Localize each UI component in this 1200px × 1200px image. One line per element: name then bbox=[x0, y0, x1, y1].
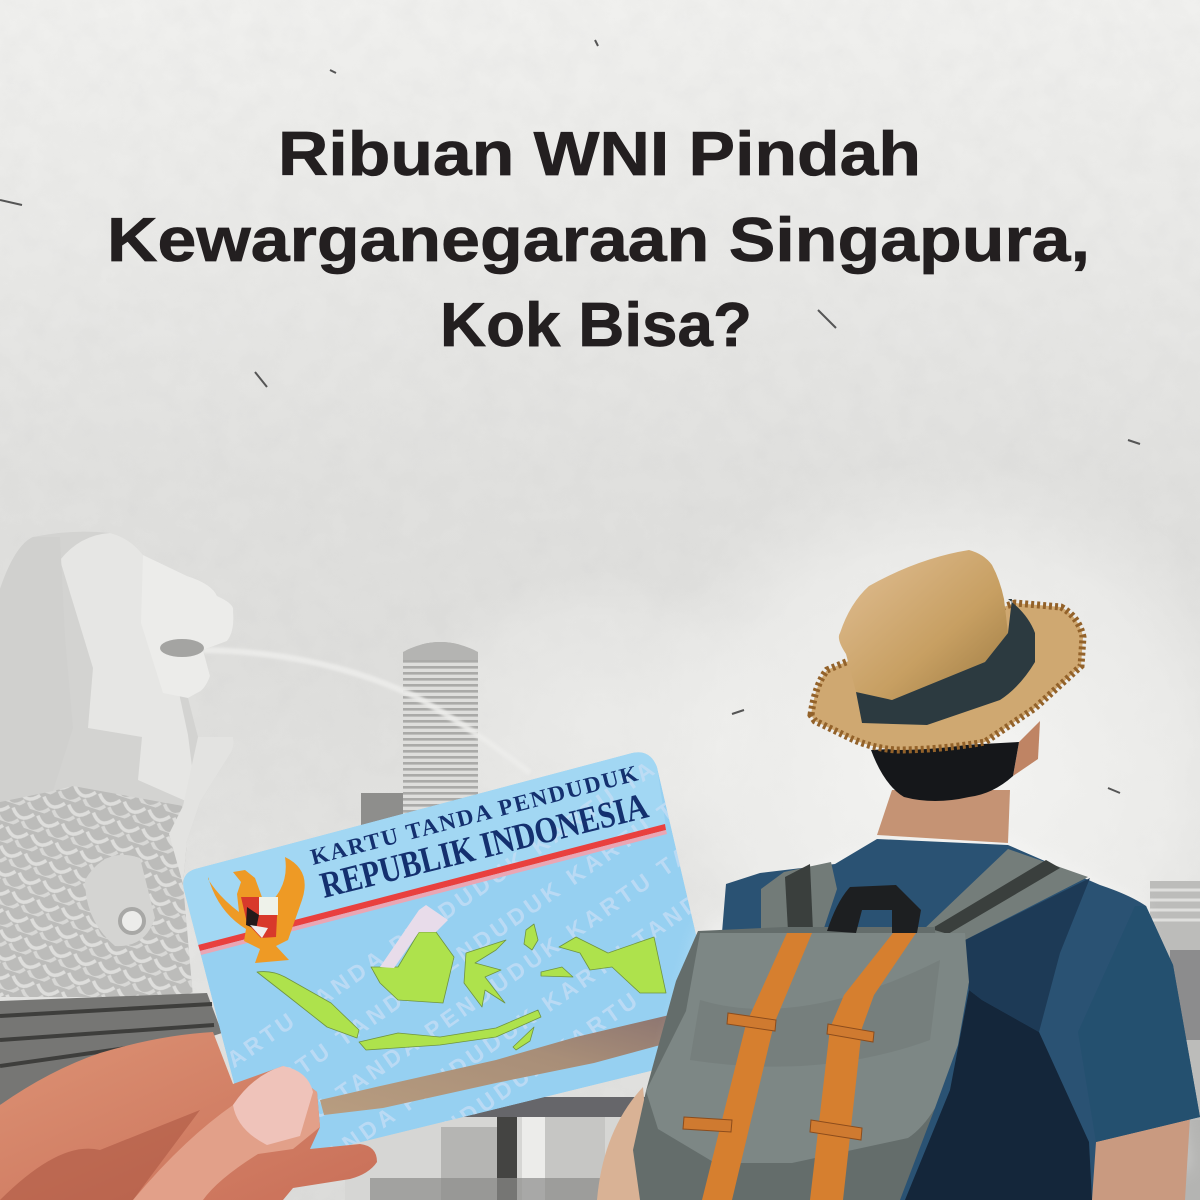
card heading: REPUBLIK INDONESIA bbox=[316, 786, 652, 907]
card watermark text: TANDA PENDUDUK KARTU TANDA bbox=[307, 875, 724, 1178]
backpack handle bbox=[827, 885, 921, 933]
left arm bbox=[597, 1087, 653, 1200]
map: Seram bbox=[541, 967, 573, 977]
title: Kewarganegaraan Singapura, bbox=[107, 206, 1090, 275]
orange straps bbox=[702, 933, 812, 1200]
land strip bbox=[320, 1013, 690, 1115]
hat crown bbox=[839, 550, 1008, 700]
title: Kok Bisa? bbox=[440, 291, 752, 360]
map: Java and Nusa Tenggara bbox=[359, 1010, 541, 1050]
backpack body bbox=[633, 927, 935, 1200]
skyline: tower bbox=[361, 642, 478, 827]
halo shadow bbox=[640, 841, 1190, 1170]
left shoulder strap bbox=[761, 862, 837, 931]
card watermark text: KARTU TANDA PENDUDUK KARTU TAN bbox=[240, 827, 714, 1170]
sleeve bbox=[1078, 906, 1200, 1142]
merlion water jet bbox=[203, 650, 530, 773]
merlion spiral bbox=[85, 855, 155, 946]
hat band bbox=[856, 599, 1035, 725]
merlion face bbox=[141, 555, 233, 698]
map: Papua bbox=[559, 937, 666, 993]
right shoulder strap bbox=[923, 849, 1088, 940]
hat brim bbox=[811, 603, 1083, 750]
card watermark text: PENDUDUK KARTU bbox=[406, 985, 645, 1163]
card heading: KARTU TANDA PENDUDUK bbox=[308, 761, 640, 870]
quay and pillars under card bbox=[345, 1097, 645, 1200]
map: Malaysia bbox=[380, 905, 448, 968]
neck bbox=[877, 790, 1010, 843]
strap buckles bbox=[683, 1013, 874, 1140]
identity card bbox=[183, 752, 696, 1149]
map of Indonesia bbox=[257, 905, 666, 1050]
ear bbox=[1013, 721, 1040, 776]
merlion statue bbox=[0, 532, 234, 1105]
t-shirt bbox=[700, 839, 1200, 1200]
merlion silhouette bbox=[0, 532, 234, 997]
card body bbox=[183, 752, 721, 1166]
traveller bbox=[597, 550, 1200, 1200]
title bbox=[107, 120, 1090, 360]
card watermark text: UK KARTU TANDA PENDUDUK KARTU TANDA bbox=[198, 748, 748, 1144]
merlion mouth bbox=[160, 639, 204, 657]
map: Timor bbox=[513, 1027, 534, 1050]
merlion base steps bbox=[0, 993, 222, 1105]
red stripe bbox=[198, 824, 666, 951]
finger crease bbox=[0, 1110, 200, 1200]
hair bbox=[871, 742, 1019, 801]
hand holding card bbox=[0, 1032, 377, 1200]
merlion tail fin bbox=[169, 737, 234, 884]
thumb bbox=[133, 1066, 320, 1200]
shirt shadow bbox=[905, 990, 1092, 1200]
title: Ribuan WNI Pindah bbox=[278, 120, 921, 189]
backpack flap bbox=[646, 933, 969, 1163]
right arm bbox=[1088, 1117, 1190, 1200]
thumb nail bbox=[233, 1066, 313, 1145]
map: Kalimantan bbox=[371, 932, 454, 1003]
card watermark text: KARTU TANDA PENDUDUK KARTU TANDA bbox=[205, 718, 713, 1085]
map: Sumatra bbox=[257, 972, 359, 1038]
merlion fish scales bbox=[0, 786, 193, 997]
skyline: right building bbox=[1150, 881, 1200, 1200]
icon: garuda emblem bbox=[208, 857, 305, 963]
map: Halmahera bbox=[524, 924, 538, 950]
map: Sulawesi bbox=[464, 940, 506, 1007]
merlion mane bbox=[60, 533, 197, 806]
fingers bbox=[0, 1032, 377, 1200]
